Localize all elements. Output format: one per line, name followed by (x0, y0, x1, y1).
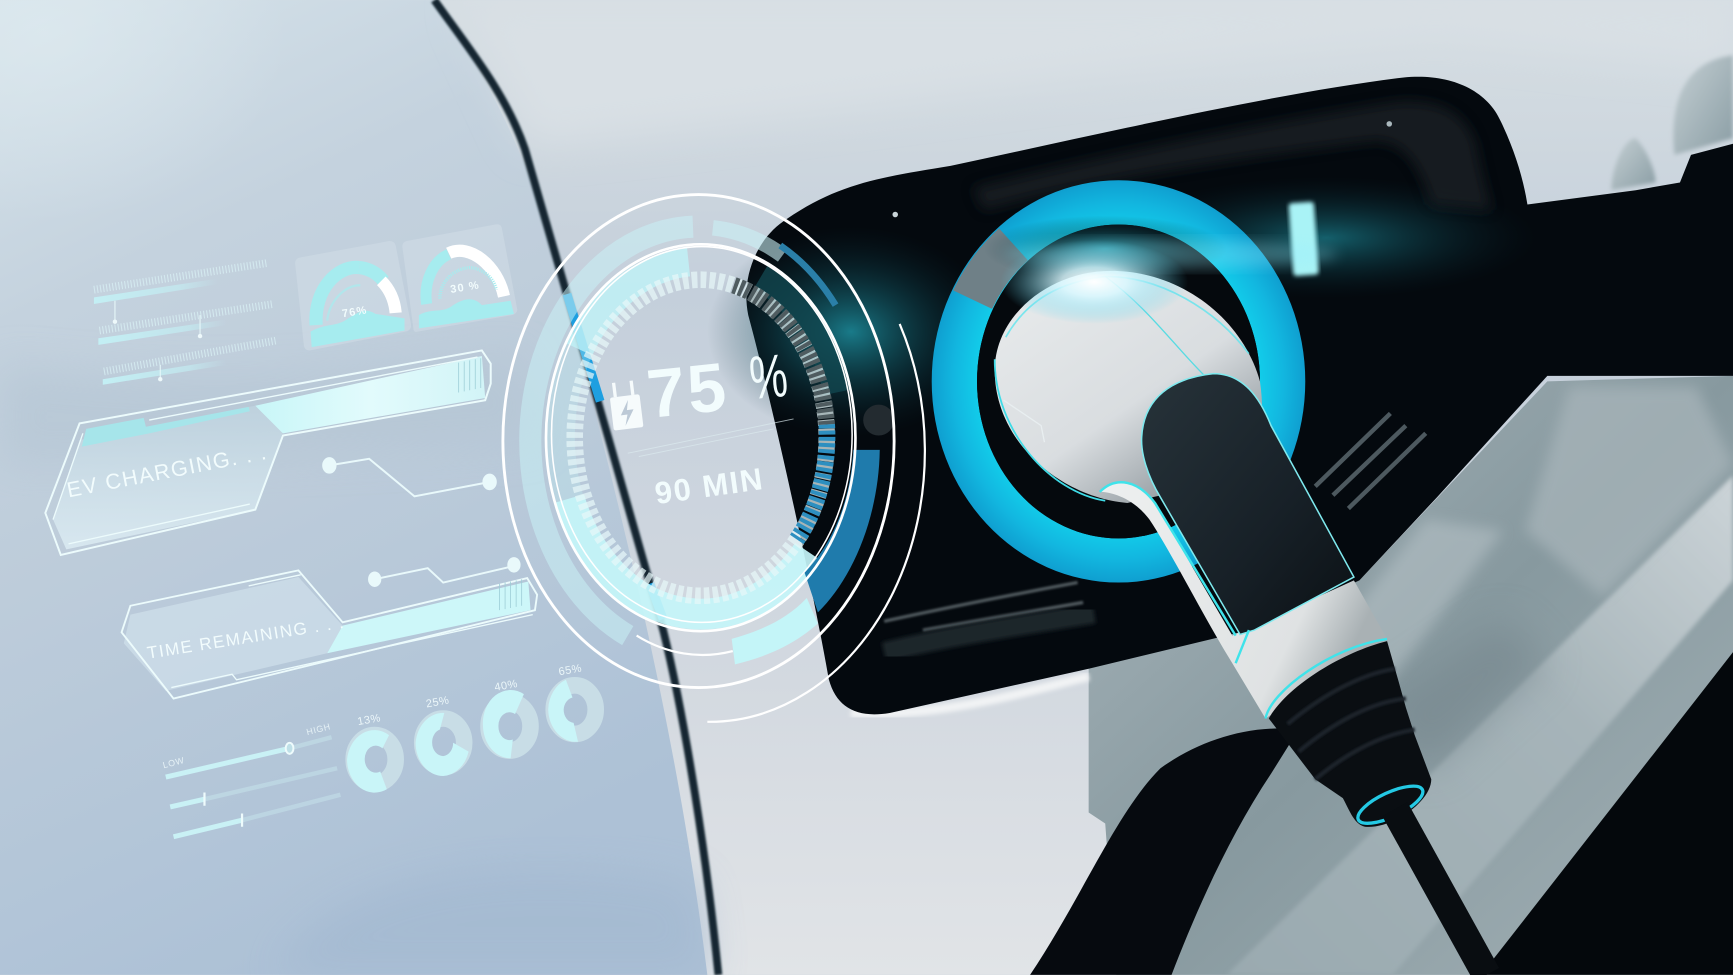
dial divider (628, 419, 794, 457)
plug strain relief (1269, 641, 1431, 831)
percent sign: % (747, 341, 790, 413)
icon: battery charge (608, 380, 643, 431)
hud: slider scales (94, 263, 276, 385)
blue arc on port (805, 450, 880, 612)
charging port recess (707, 77, 1733, 714)
hud connector two (369, 558, 520, 586)
plug black grip (1142, 374, 1354, 634)
time remaining value: 90 MIN (653, 461, 766, 511)
charging cable (1395, 809, 1487, 975)
charge percent value: 75 (643, 348, 732, 433)
donut chart 13 percent: 13% (357, 712, 382, 728)
plug light flare (1000, 240, 1337, 324)
plug head (995, 271, 1262, 503)
donut chart 25 percent (416, 695, 469, 776)
charging indicator light (1288, 202, 1319, 276)
dial rings (503, 195, 925, 722)
outer pale arc band (530, 227, 693, 636)
plug white body (1100, 482, 1387, 718)
hud connector one (323, 458, 496, 496)
hud: gauge card 76 percent (295, 241, 411, 350)
panel label: EV CHARGING. . . (65, 439, 270, 502)
hud: gauge card 30 percent (402, 224, 517, 332)
donut chart 65 percent (548, 662, 596, 742)
tick ring (575, 280, 827, 596)
donut chart 40 percent: 40% (494, 678, 519, 694)
gauge value: 30 % (450, 279, 481, 296)
plug cyan accents (1100, 482, 1387, 718)
donut chart 40 percent (483, 678, 531, 758)
glowing cyan ring (932, 180, 1305, 583)
rear fins top right (1611, 55, 1733, 190)
donut chart 25 percent: 25% (425, 695, 450, 710)
hud panel: EV charging (45, 350, 491, 555)
inner bright arc band (579, 262, 689, 349)
reflective lower body (851, 376, 1733, 975)
slider labels: LOW (162, 755, 186, 770)
bright seam through dial (567, 294, 663, 619)
central charge dial (503, 195, 925, 722)
donut chart 65 percent: 65% (558, 662, 583, 678)
hud level sliders: HIGH (305, 721, 332, 737)
body panel seam (434, 0, 718, 975)
gauge value: 76% (341, 304, 368, 320)
donut chart 13 percent (347, 712, 396, 793)
panel label: TIME REMAINING . . . (146, 612, 346, 663)
hud panel: time remaining (122, 570, 537, 699)
hud level sliders (162, 721, 340, 837)
